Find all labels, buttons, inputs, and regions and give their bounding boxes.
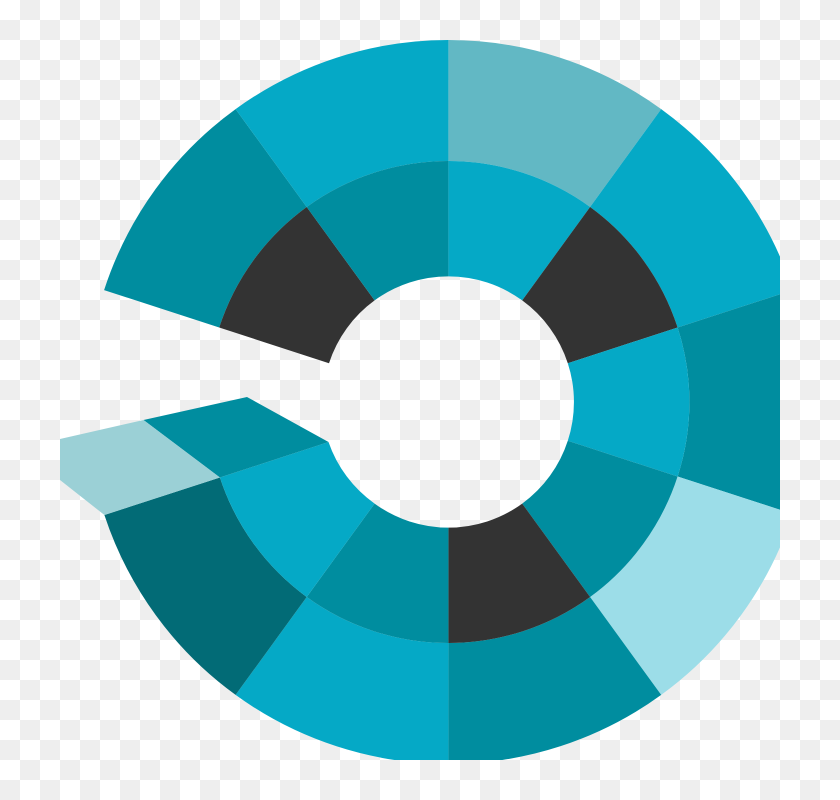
outer segment 10 (236, 40, 448, 207)
outer segment 9 (104, 109, 307, 327)
outer segment 2 (590, 109, 793, 327)
outer ring segments (104, 40, 810, 764)
inner segment 9 (219, 207, 375, 363)
inner segment 4 (522, 441, 678, 597)
outer segment 1 (448, 40, 661, 207)
outer segment 7 (104, 478, 307, 695)
displaced fold piece: teal (144, 397, 328, 478)
inner segment 6 (307, 504, 448, 643)
inner segment 1 (448, 161, 590, 300)
inner segment 10 (307, 161, 448, 300)
outer segment 4 (590, 476, 793, 695)
inner segment 7 (220, 442, 375, 597)
outer segment 5 (448, 597, 661, 764)
inner segment 3 (568, 328, 689, 476)
inner ring segments (219, 161, 689, 643)
outer segment 3 (678, 294, 780, 510)
inner segment 5 (448, 504, 590, 643)
inner segment 2 (522, 207, 678, 363)
displaced fold piece: pale (60, 420, 220, 515)
outer segment 6 (236, 597, 448, 764)
